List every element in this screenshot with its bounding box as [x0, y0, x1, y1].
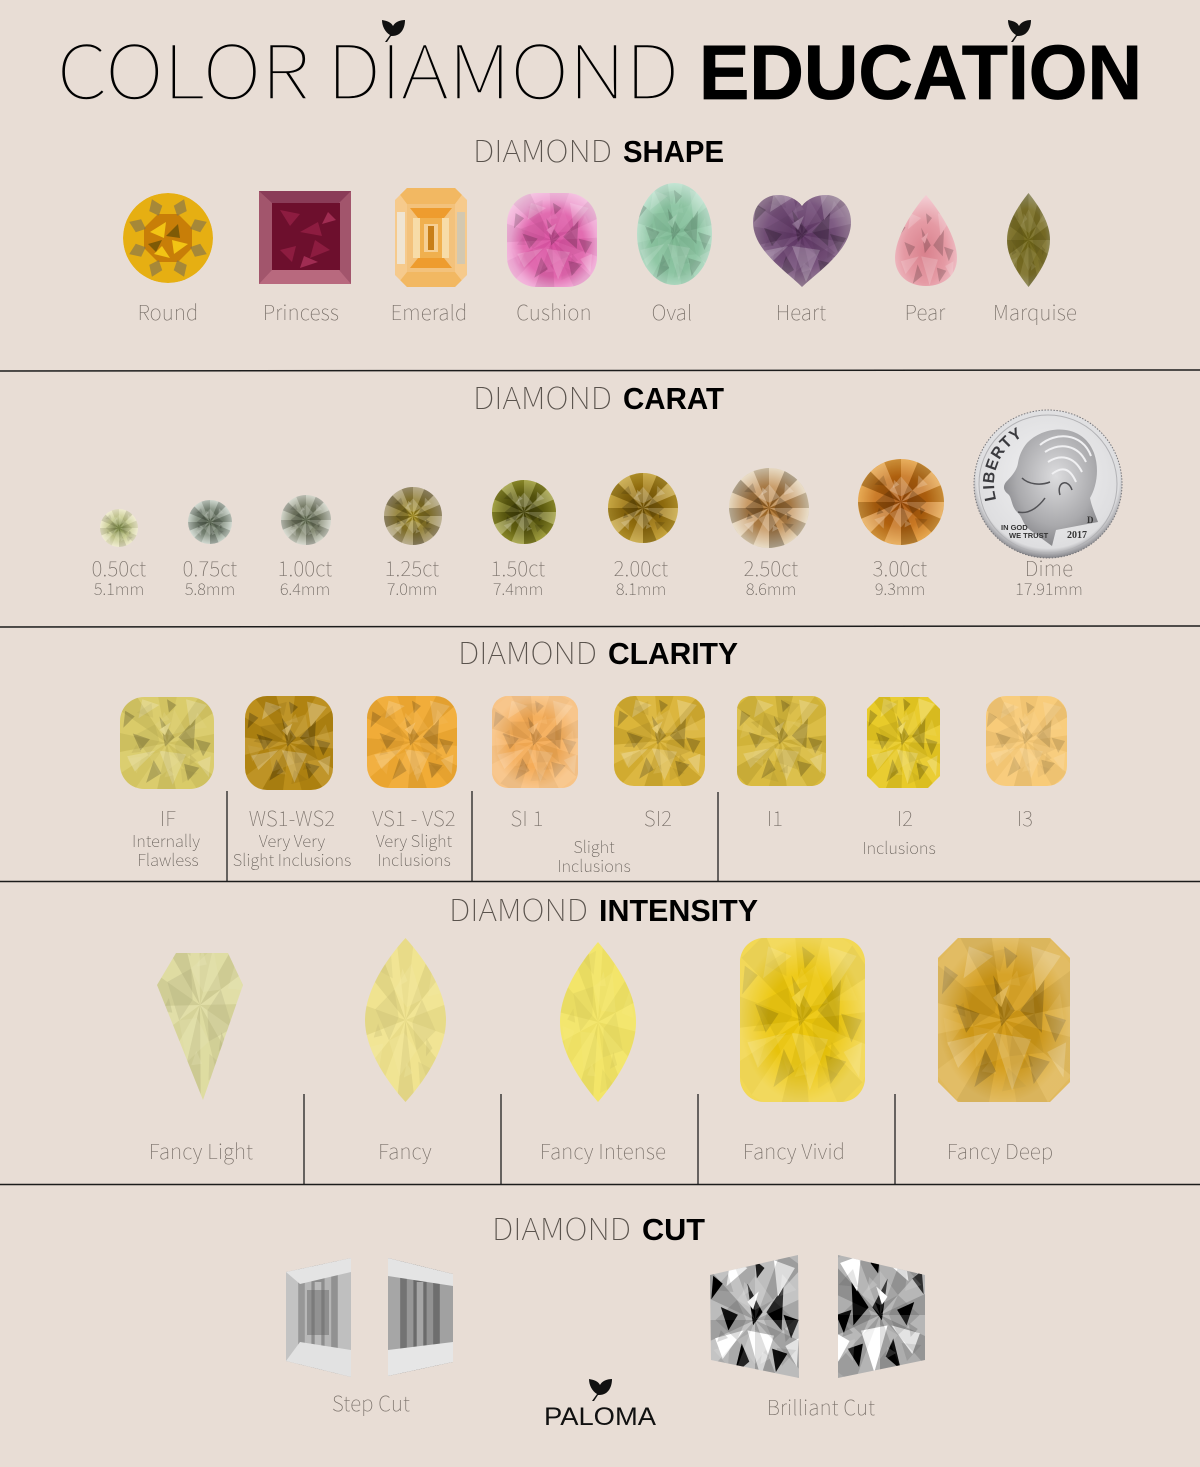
- icon: bird over second title I: [1008, 20, 1031, 42]
- label: VS1-VS2: [372, 802, 456, 871]
- label: 1.00ct: 6.4mm: [280, 576, 330, 600]
- icon: dime coin: [974, 410, 1122, 558]
- gem: 1.00ct: [280, 494, 332, 546]
- gem: heart: [753, 195, 851, 287]
- label: 0.50ct: 0.50ct: [92, 552, 146, 582]
- label: fancy: Fancy: [378, 1135, 432, 1165]
- gem: WS1-WS2: [245, 696, 333, 790]
- label: 0.50ct: [92, 552, 146, 600]
- gem: 1.25ct: [383, 486, 443, 546]
- gem: 0.75ct: [188, 500, 232, 544]
- label: 3.00ct: 3.00ct: [873, 552, 927, 582]
- gem: round: [123, 193, 213, 283]
- label: SI grades: SI 1: [511, 802, 543, 832]
- label: 1.50ct: [491, 552, 545, 600]
- label: 2.00ct: 2.00ct: [614, 552, 668, 582]
- label: 1.25ct: 1.25ct: [385, 552, 439, 582]
- gem: IF: [120, 697, 214, 789]
- gem: pear: [895, 196, 957, 286]
- heading: diamond clarity: [458, 629, 738, 673]
- gem: I3: [986, 696, 1067, 786]
- icon: dime coin: IN GOD: [1001, 523, 1028, 532]
- label: 0.50ct: 5.1mm: [94, 576, 144, 600]
- gem: oval: [637, 183, 712, 285]
- label: fancy intense: Fancy Intense: [540, 1135, 666, 1165]
- label: IF: [132, 802, 200, 871]
- label: 1.25ct: [385, 552, 439, 600]
- gem: cushion: [507, 193, 597, 287]
- label: VS1-VS2: Very Slight: [376, 828, 453, 852]
- heading: diamond shape: SHAPE: [623, 134, 724, 169]
- title: COLOR DIAMOND: [57, 14, 679, 120]
- gem: marquise: [1007, 193, 1050, 287]
- label: 2.50ct: 8.6mm: [746, 576, 796, 600]
- panel: clarity grades: [120, 696, 1067, 881]
- label: heart: Heart: [776, 296, 826, 326]
- label: 2.00ct: [614, 552, 668, 600]
- gem: fancy intense: [560, 942, 636, 1102]
- label: brilliant cut: Brilliant Cut: [767, 1391, 875, 1421]
- icon: dime coin: 2017: [1067, 530, 1087, 541]
- heading: diamond intensity: DIAMOND: [449, 886, 588, 930]
- logo: Paloma: [544, 1379, 656, 1431]
- label: I grades: I1: [767, 802, 783, 832]
- label: IF: Internally: [132, 828, 200, 852]
- heading: diamond cut: CUT: [642, 1212, 705, 1247]
- label: step cut: Step Cut: [332, 1387, 410, 1417]
- label: I grades: I2: [897, 802, 913, 832]
- heading: diamond carat: DIAMOND: [473, 374, 612, 418]
- gem: I1: [737, 696, 826, 786]
- label: 1.25ct: 7.0mm: [387, 576, 437, 600]
- label: SI grades: [511, 802, 672, 877]
- gem: 3.00ct: [858, 458, 944, 546]
- heading: diamond shape: [473, 127, 724, 171]
- heading: diamond carat: [473, 374, 724, 418]
- label: emerald: Emerald: [391, 296, 467, 326]
- label: 1.50ct: 7.4mm: [493, 576, 543, 600]
- gem: 2.00ct: [607, 472, 679, 544]
- label: IF: Flawless: [137, 847, 199, 871]
- label: dime: Dime: [1025, 552, 1073, 582]
- gem: fancy: [365, 938, 446, 1102]
- label: VS1-VS2: VS1 - VS2: [372, 802, 456, 832]
- label: 2.50ct: 2.50ct: [744, 552, 798, 582]
- label: WS1-WS2: Slight Inclusions: [233, 847, 351, 871]
- gem: step cut front: [286, 1258, 351, 1377]
- heading: diamond intensity: INTENSITY: [599, 893, 758, 928]
- icon: dime coin: D: [1087, 515, 1094, 525]
- label: I grades: I3: [1017, 802, 1033, 832]
- gem: fancy vivid: [740, 938, 865, 1102]
- heading: diamond shape: DIAMOND: [473, 127, 612, 171]
- label: dime: 17.91mm: [1015, 576, 1083, 600]
- label: fancy light: Fancy Light: [149, 1135, 253, 1165]
- panel: diamond shapes: [123, 183, 1076, 325]
- label: 2.50ct: [744, 552, 798, 600]
- heading: diamond intensity: [449, 886, 758, 930]
- label: WS1-WS2: [233, 802, 351, 871]
- heading: diamond clarity: DIAMOND: [458, 629, 597, 673]
- gem: brilliant cut back: [838, 1255, 925, 1378]
- title: [57, 14, 1142, 120]
- icon: bird over title I: [382, 20, 405, 42]
- label: marquise: Marquise: [993, 296, 1077, 326]
- label: 0.75ct: 5.8mm: [185, 576, 235, 600]
- gem: 1.50ct: [491, 479, 557, 545]
- gem: SI1: [492, 696, 578, 788]
- gem: step cut back: [388, 1258, 453, 1376]
- gem: 2.50ct: [728, 468, 810, 548]
- panel: diamond cut: [286, 1255, 925, 1416]
- gem: fancy light: [157, 953, 243, 1100]
- icon: dime coin: WE TRUST: [1009, 531, 1049, 540]
- gem: brilliant cut front: [710, 1255, 799, 1378]
- gem: SI2: [614, 696, 705, 786]
- label: I grades: Inclusions: [862, 835, 936, 859]
- label: fancy deep: Fancy Deep: [947, 1135, 1053, 1165]
- label: WS1-WS2: Very Very: [259, 828, 325, 852]
- label: princess: Princess: [263, 296, 339, 326]
- gem: fancy deep: [938, 938, 1070, 1102]
- label: oval: Oval: [652, 296, 692, 326]
- label: 3.00ct: [873, 552, 927, 600]
- gem: VS1-VS2: [367, 696, 457, 788]
- panel: intensity grades: [151, 938, 1070, 1184]
- title: EDUCATION: [699, 30, 1142, 116]
- heading: diamond cut: [492, 1205, 705, 1249]
- label: SI grades: SI2: [644, 802, 672, 832]
- label: VS1-VS2: Inclusions: [377, 847, 451, 871]
- label: round: Round: [138, 296, 198, 326]
- label: WS1-WS2: WS1-WS2: [249, 802, 335, 832]
- label: SI grades: Inclusions: [557, 853, 631, 877]
- label: 0.75ct: 0.75ct: [183, 552, 237, 582]
- gem: I2: [867, 697, 940, 788]
- label: fancy vivid: Fancy Vivid: [743, 1135, 845, 1165]
- label: IF: IF: [160, 802, 176, 832]
- label: pear: Pear: [905, 296, 946, 326]
- logo: Paloma: PALOMA: [544, 1403, 656, 1431]
- heading: diamond clarity: CLARITY: [608, 636, 738, 671]
- label: 0.75ct: [183, 552, 237, 600]
- label: dime: [1015, 552, 1083, 600]
- heading: diamond carat: CARAT: [623, 381, 724, 416]
- label: cushion: Cushion: [516, 296, 592, 326]
- label: 1.00ct: 1.00ct: [278, 552, 332, 582]
- label: 1.00ct: [278, 552, 332, 600]
- panel: carat sizes: [92, 410, 1122, 600]
- label: I grades: [767, 802, 1033, 859]
- icon: dime coin: LIBERTY: [982, 427, 1020, 502]
- gem: princess: [259, 191, 351, 284]
- label: 3.00ct: 9.3mm: [875, 576, 925, 600]
- label: 1.50ct: 1.50ct: [491, 552, 545, 582]
- label: 2.00ct: 8.1mm: [616, 576, 666, 600]
- label: SI grades: Slight: [573, 834, 615, 858]
- heading: diamond cut: DIAMOND: [492, 1205, 631, 1249]
- gem: emerald: [395, 188, 467, 287]
- gem: 0.50ct: [100, 509, 138, 547]
